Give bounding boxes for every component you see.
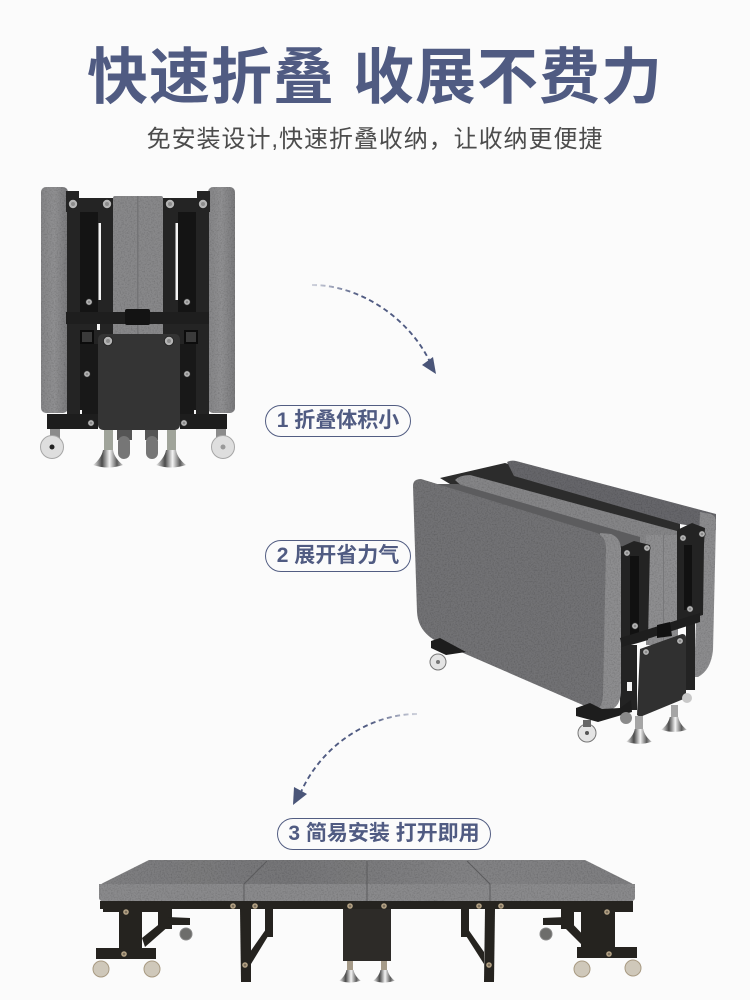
rear cushion top strip	[507, 461, 716, 530]
middle cushion end	[646, 535, 678, 645]
mattress	[99, 860, 635, 901]
title: 快速折叠 收展不费力	[87, 43, 663, 111]
middle cushion top strip	[455, 475, 677, 546]
middle cushion dark side	[425, 484, 640, 552]
center cushion	[113, 196, 163, 338]
label: step 3: 3 简易安装 打开即用	[288, 822, 480, 845]
front cushion side	[596, 533, 621, 712]
casters	[93, 960, 641, 977]
casters	[430, 654, 692, 742]
base bar and back foot	[576, 700, 632, 722]
label: step 1	[265, 405, 411, 437]
arrow: step 1 to step 2	[312, 285, 436, 374]
hinge plate	[98, 334, 180, 430]
square tubes	[81, 331, 197, 343]
inner leg frames	[240, 909, 495, 982]
strap	[620, 613, 700, 647]
center support plate	[343, 909, 391, 961]
frame top rail	[100, 901, 633, 909]
label: step 1: 1 折叠体积小	[277, 409, 399, 432]
white slots	[80, 223, 196, 414]
rear cushion right edge	[694, 512, 716, 677]
hinge bolts	[123, 909, 129, 915]
bolts	[68, 199, 78, 209]
label: step 3	[277, 818, 491, 850]
right cushion	[208, 187, 235, 413]
front frame	[620, 541, 650, 710]
base bar	[47, 414, 98, 429]
hinge plate	[637, 634, 686, 717]
label: step 2: 2 展开省力气	[277, 544, 399, 567]
label: step 2	[265, 540, 411, 572]
casters	[40, 429, 234, 459]
figure: unfolded bed	[93, 860, 641, 983]
left end legs	[96, 905, 190, 959]
center adjustable feet	[339, 961, 395, 983]
subtitle: 免安装设计,快速折叠收纳，让收纳更便捷	[147, 126, 603, 153]
front cushion face	[413, 479, 606, 709]
figure: folded bed, front view	[40, 187, 235, 468]
bolts	[623, 549, 631, 557]
black gap between cushions	[440, 463, 680, 548]
arrow: step 2 to step 3	[293, 714, 417, 805]
strap with buckle	[66, 312, 209, 324]
adjustable feet	[626, 705, 687, 744]
right end legs	[543, 905, 637, 958]
black frame	[66, 191, 210, 415]
adjustable feet	[93, 430, 186, 468]
mattress seams	[244, 861, 490, 901]
figure: folded bed, three-quarter view	[413, 461, 716, 744]
rear frame	[677, 523, 705, 690]
left cushion	[41, 187, 68, 413]
